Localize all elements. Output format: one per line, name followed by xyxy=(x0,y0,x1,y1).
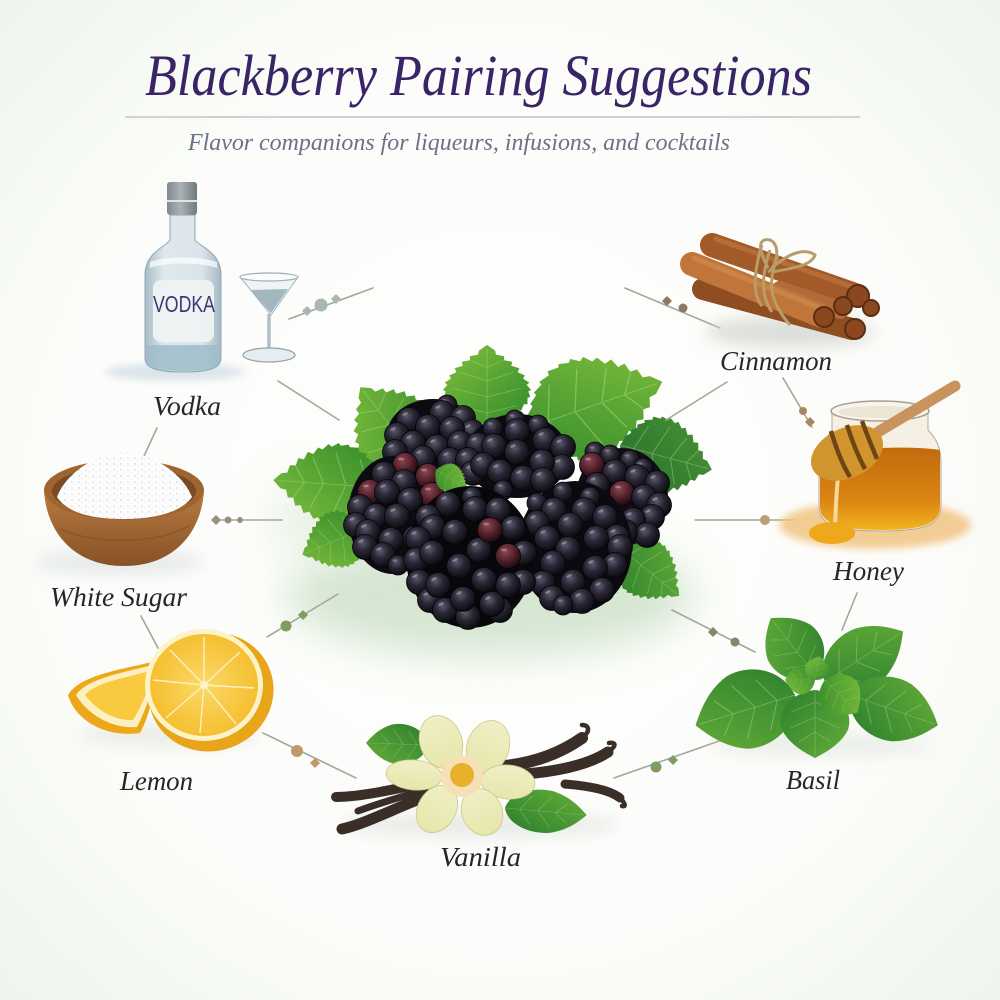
icon: vanilla flower and pods xyxy=(336,709,625,842)
icon: vodka bottle xyxy=(105,182,245,381)
berry: front xyxy=(404,486,536,630)
bottle label text: VODKA xyxy=(153,291,216,317)
berry: right xyxy=(576,442,672,548)
connector: honey xyxy=(695,515,795,525)
connector: vanilla to basil xyxy=(614,740,722,778)
label: lemon: Lemon xyxy=(119,766,193,796)
icon: basil xyxy=(684,601,948,763)
berry: back centre xyxy=(456,410,576,500)
connector: lemon to vanilla xyxy=(263,733,356,778)
label: cinnamon: Cinnamon xyxy=(720,346,832,376)
berry: front right xyxy=(518,481,632,615)
berry: left xyxy=(344,452,444,575)
label: white sugar: White Sugar xyxy=(50,582,187,612)
connector: cinnamon xyxy=(625,288,720,328)
connector: vodka label to sugar xyxy=(144,428,157,456)
icon: sugar bowl xyxy=(35,452,205,574)
small inner leaf xyxy=(429,457,475,501)
label: honey: Honey xyxy=(832,556,904,586)
connector: vodka to berries xyxy=(278,381,339,420)
connector: cinnamon to berries xyxy=(666,382,727,420)
connector: vodka glass xyxy=(289,288,373,319)
icon: honey jar xyxy=(779,386,971,549)
icon: cinnamon sticks xyxy=(692,239,879,348)
connector: honey label to basil xyxy=(842,593,857,630)
label: vanilla: Vanilla xyxy=(440,842,521,872)
central blackberries and leaves xyxy=(270,333,722,657)
berry: back left xyxy=(382,395,484,472)
subtitle: Flavor companions for liqueurs, infusions, and cocktails xyxy=(187,130,730,156)
connector: cinnamon to honey xyxy=(783,378,815,427)
icon: lemon xyxy=(68,615,290,769)
icon: martini glass xyxy=(240,273,298,362)
connector: berries to basil xyxy=(672,610,755,652)
connector: white sugar label to lemon xyxy=(141,616,158,648)
leaves xyxy=(270,333,722,619)
label: vodka: Vodka xyxy=(153,391,221,421)
title: Blackberry Pairing Suggestions xyxy=(145,43,812,108)
connector: sugar xyxy=(211,515,282,525)
connector: lemon to berries xyxy=(267,594,338,637)
label: basil: Basil xyxy=(786,765,840,795)
